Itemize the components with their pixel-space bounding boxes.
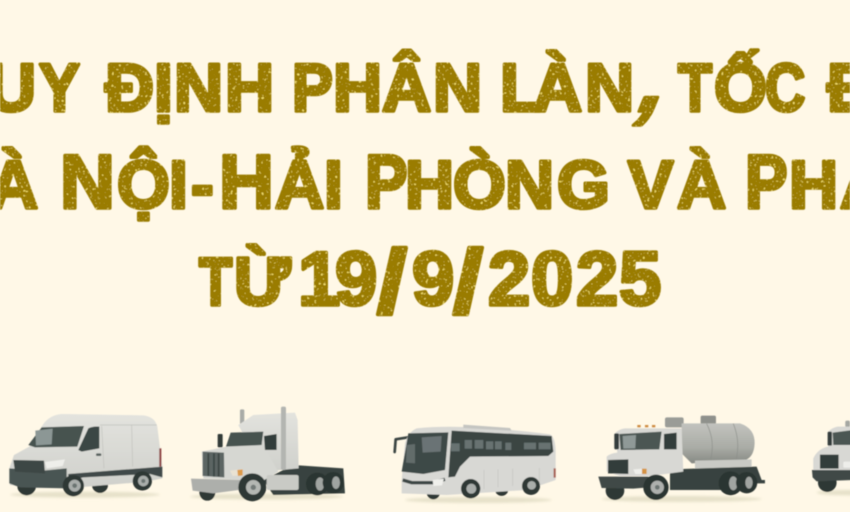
icon: semi truck	[190, 407, 345, 501]
title line 1: LÀN	[500, 50, 634, 126]
title line 1: P	[292, 49, 333, 126]
title line 2: VÀ	[628, 147, 726, 223]
icon: white van	[9, 414, 162, 498]
title line 1: HÂN	[333, 49, 482, 126]
icon: cropped truck at right edge	[812, 421, 850, 495]
title line 1: T	[678, 51, 712, 126]
icon: coach bus	[395, 425, 556, 503]
title line 3: 9	[412, 237, 454, 322]
title line 3: 2025	[488, 237, 661, 322]
title line 3	[199, 232, 661, 333]
title line 1: ĐỊNH	[105, 50, 274, 126]
title line 3: T	[199, 244, 232, 320]
title line 1: ,	[625, 29, 691, 130]
title	[0, 29, 850, 333]
icon: tanker truck	[598, 416, 765, 502]
title line 1: Ố	[714, 49, 767, 126]
title line 1	[0, 29, 850, 130]
title line 2: N	[60, 140, 115, 225]
title line 3: /	[453, 232, 483, 333]
title line 2: P	[745, 139, 788, 224]
title line 2: -	[191, 147, 214, 223]
title line 3: Ừ	[234, 244, 291, 320]
title line 1: Y	[39, 49, 80, 126]
title line 2: ẢI	[275, 146, 343, 223]
vehicle row	[9, 407, 850, 503]
title line 2	[0, 139, 850, 225]
title line 3: 19	[298, 237, 377, 322]
title line 1: C	[765, 51, 805, 126]
title line 2: P	[365, 139, 408, 224]
title line 2: HÒNG	[405, 147, 610, 223]
title line 3: /	[377, 232, 407, 333]
title line 2: ỘI	[117, 146, 188, 223]
title line 2: H	[219, 140, 274, 225]
